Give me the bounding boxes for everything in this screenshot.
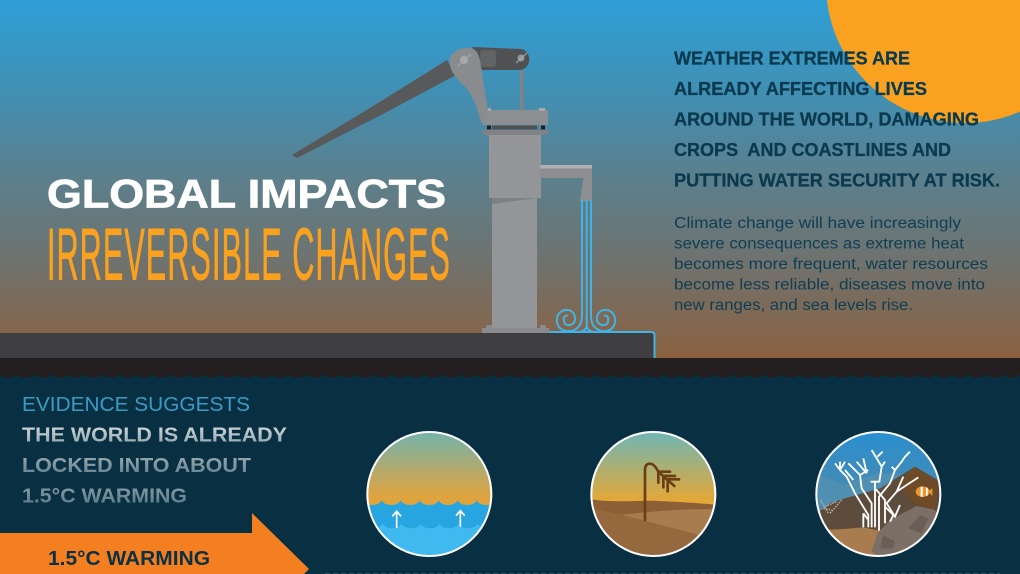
evidence text block bbox=[22, 393, 287, 508]
pump head plate bbox=[482, 108, 549, 137]
body paragraph: new ranges, and sea levels rise. bbox=[674, 297, 913, 314]
evidence text block: THE WORLD IS ALREADY bbox=[22, 424, 287, 446]
headline text block: PUTTING WATER SECURITY AT RISK. bbox=[674, 170, 1000, 190]
pump spout bbox=[540, 165, 592, 201]
icon: drought wilted plant bbox=[588, 432, 718, 563]
water stream with spirals bbox=[549, 200, 654, 358]
body paragraph: severe consequences as extreme heat bbox=[674, 236, 965, 252]
warming arrow bbox=[0, 513, 309, 574]
dark scalloped water edge band bbox=[0, 358, 1020, 379]
headline text block bbox=[674, 48, 1000, 190]
body paragraph: becomes more frequent, water resources bbox=[674, 256, 988, 273]
evidence text block: EVIDENCE SUGGESTS bbox=[22, 393, 250, 416]
dark navy lower panel bbox=[0, 370, 1020, 574]
body paragraph: Climate change will have increasingly bbox=[674, 215, 961, 232]
body paragraph bbox=[674, 215, 988, 314]
pump pivot bracket bbox=[450, 48, 488, 125]
headline text block: CROPS AND COASTLINES AND bbox=[674, 140, 951, 160]
fish bbox=[916, 486, 932, 497]
sky background bbox=[0, 0, 1020, 358]
icon: sea level rise bbox=[366, 431, 492, 557]
headline text block: AROUND THE WORLD, DAMAGING bbox=[674, 110, 979, 130]
evidence text block: LOCKED INTO ABOUT bbox=[22, 454, 251, 477]
pump lower column bbox=[492, 198, 537, 329]
water pump bbox=[292, 47, 592, 333]
pump rocker arm bbox=[472, 47, 529, 70]
body paragraph: become less reliable, diseases move into bbox=[674, 276, 985, 294]
sun bbox=[826, 0, 1020, 123]
title bbox=[47, 172, 451, 296]
pump upper column bbox=[489, 135, 541, 198]
icon: coral reef bbox=[813, 432, 943, 563]
concrete platform bbox=[0, 333, 655, 358]
small grey coral bbox=[821, 500, 842, 513]
headline text block: ALREADY AFFECTING LIVES bbox=[674, 79, 927, 99]
headline text block: WEATHER EXTREMES ARE bbox=[674, 48, 910, 68]
pump rod bbox=[520, 70, 524, 111]
infographic canvas: IRREVERSIBLE CHANGES bbox=[47, 214, 451, 296]
arrow label: 1.5°C WARMING bbox=[48, 548, 210, 570]
title line: global impacts: GLOBAL IMPACTS bbox=[47, 172, 446, 216]
white coral branches bbox=[835, 450, 918, 531]
pump base bbox=[482, 325, 549, 333]
evidence text block: 1.5°C WARMING bbox=[22, 484, 187, 508]
pump handle bbox=[292, 60, 456, 158]
